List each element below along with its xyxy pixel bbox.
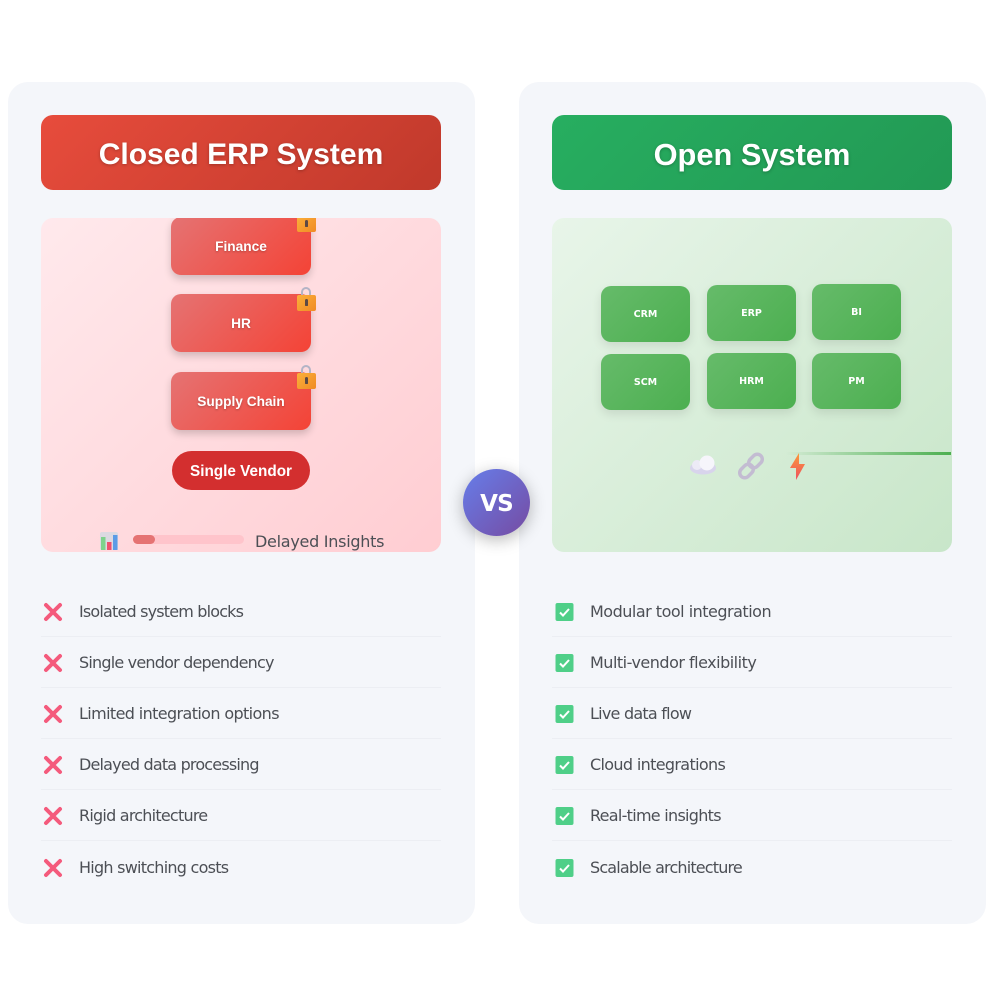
- list row: Real-time insights: [552, 790, 952, 841]
- list row: High switching costs: High switching costs: [79, 858, 228, 877]
- list row: Multi-vendor flexibility: Multi-vendor flexibility: [590, 653, 756, 672]
- list row: Isolated system blocks: [41, 586, 441, 637]
- diagram: open system modules: [552, 218, 952, 552]
- list row: Live data flow: Live data flow: [590, 704, 691, 723]
- badge: Single Vendor: [172, 451, 310, 490]
- label: Delayed Insights: Delayed Insights: [255, 532, 384, 551]
- list row: Cloud integrations: Cloud integrations: [590, 755, 725, 774]
- heading: Open System: [552, 115, 952, 190]
- list row: Limited integration options: [41, 688, 441, 739]
- block: Finance: Finance: [215, 239, 267, 254]
- module: SCM: SCM: [634, 377, 657, 388]
- list row: Rigid architecture: [41, 790, 441, 841]
- module: BI: BI: [851, 307, 862, 318]
- module: ERP: [707, 285, 796, 341]
- module: HRM: [707, 353, 796, 409]
- module: PM: PM: [848, 376, 865, 387]
- icon: cloud: [690, 456, 716, 474]
- list row: Real-time insights: Real-time insights: [590, 806, 721, 825]
- block: Supply Chain: [171, 372, 311, 430]
- list row: Scalable architecture: Scalable architecture: [590, 858, 742, 877]
- module: HRM: HRM: [739, 376, 764, 387]
- panel: closed ERP system: [8, 82, 475, 924]
- heading: Closed ERP System: Closed ERP System: [99, 138, 383, 171]
- list row: Delayed data processing: [41, 739, 441, 790]
- list row: Live data flow: [552, 688, 952, 739]
- list row: Single vendor dependency: [41, 637, 441, 688]
- module: ERP: ERP: [741, 308, 762, 319]
- block: HR: HR: [231, 316, 251, 331]
- diagram: closed system blocks: [41, 218, 441, 552]
- list row: Modular tool integration: Modular tool integration: [590, 602, 771, 621]
- list row: Multi-vendor flexibility: [552, 637, 952, 688]
- list row: Cloud integrations: [552, 739, 952, 790]
- list row: Single vendor dependency: Single vendor dependency: [79, 653, 274, 672]
- heading: Closed ERP System: [41, 115, 441, 190]
- VS badge: [463, 469, 530, 536]
- icon: bar chart: [100, 532, 118, 550]
- module: CRM: [601, 286, 690, 342]
- module: PM: [812, 353, 901, 409]
- heading: Open System: Open System: [654, 137, 850, 172]
- badge: Single Vendor: Single Vendor: [190, 463, 292, 480]
- list row: Limited integration options: Limited integration options: [79, 704, 279, 723]
- module: SCM: [601, 354, 690, 410]
- panel: open system: [519, 82, 986, 924]
- progress bar: [133, 535, 244, 544]
- block: HR: [171, 294, 311, 352]
- list row: Modular tool integration: [552, 586, 952, 637]
- block: Finance: [171, 217, 311, 275]
- block: Supply Chain: Supply Chain: [197, 394, 285, 409]
- icon: link: [738, 452, 764, 480]
- data flow line: [786, 452, 951, 455]
- icon: lightning: [790, 453, 805, 480]
- VS badge: VS: [480, 491, 513, 517]
- module: CRM: CRM: [634, 309, 657, 320]
- module: BI: [812, 284, 901, 340]
- list row: Isolated system blocks: Isolated system blocks: [79, 602, 243, 621]
- list row: Rigid architecture: Rigid architecture: [79, 806, 207, 825]
- list row: Delayed data processing: Delayed data processing: [79, 755, 259, 774]
